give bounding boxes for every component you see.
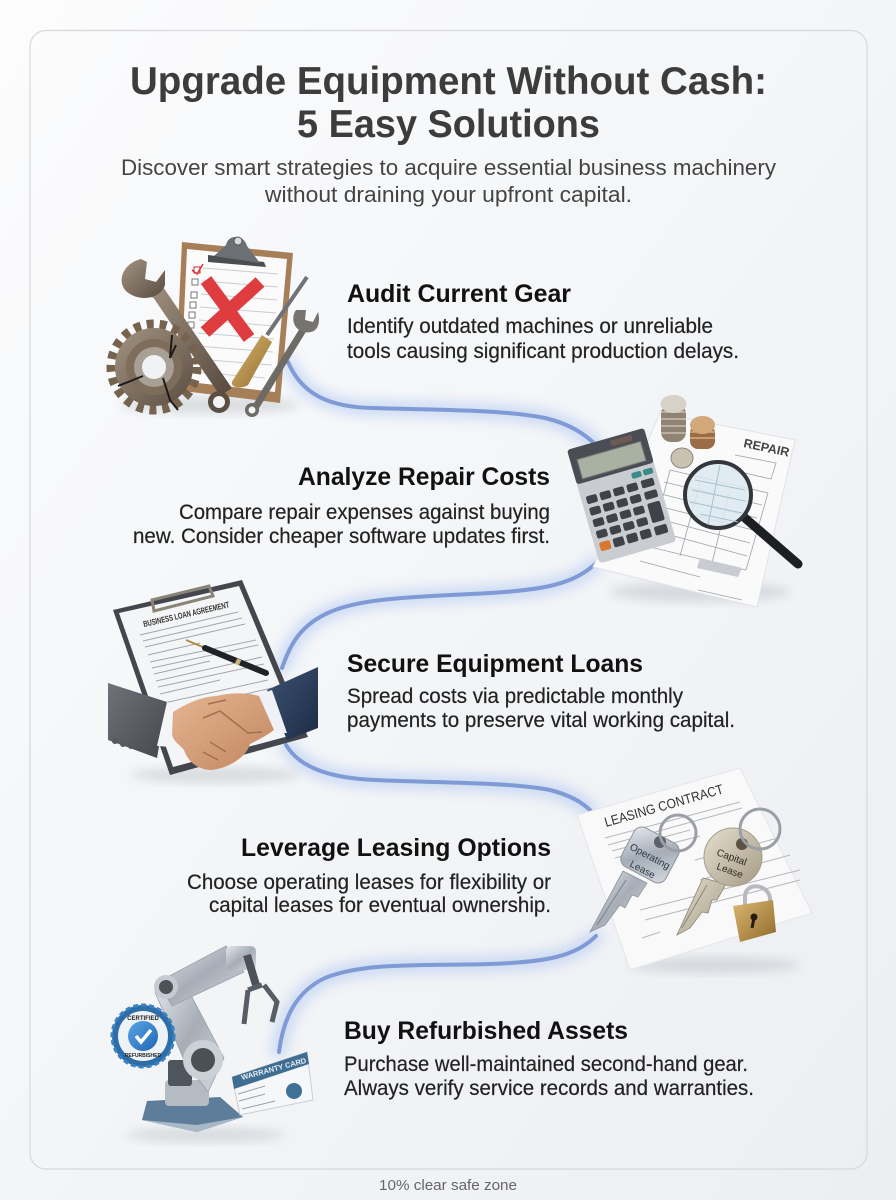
clipboard [113,580,308,775]
step 4 text [187,834,551,917]
step 2 text: Compare repair expenses against buying [179,501,550,524]
pen [186,640,266,673]
silver key: operating lease: Operating [628,842,672,872]
step 2 text [133,463,550,548]
connector: step 3 to step 4 [286,745,591,811]
broken gear [111,324,197,410]
step 1 text: tools causing significant production delays. [347,340,739,363]
icon: audit tools and clipboard [111,237,319,417]
connector: step 1 to step 2 [288,362,597,446]
step 3 text: payments to preserve vital working capital. [347,709,735,732]
silver key: operating lease: Lease [628,859,657,882]
step 4 text: Leverage Leasing Options [241,834,551,862]
warranty card [232,1052,313,1115]
small wrench [245,310,319,417]
screwdriver [232,277,307,387]
icon: loan agreement and handshake [108,580,318,783]
coin stacks [660,395,715,468]
clipboard: BUSINESS LOAN AGREEMENT [142,599,231,629]
step 5 text: Purchase well-maintained second-hand gear. [344,1053,748,1076]
certified badge [112,1005,174,1067]
step 1 text [347,280,739,363]
step 3 text: Secure Equipment Loans [347,650,643,678]
repair invoice: REPAIR [742,436,791,460]
certified badge: CERTIFIED [127,1016,159,1022]
icon: calculator, repair invoice and magnifier [567,395,798,607]
wrench [122,259,230,413]
step 1 text: Identify outdated machines or unreliable [347,315,713,338]
contract: LEASING CONTRACT [603,782,725,830]
subtitle: without draining your upfront capital. [264,182,632,207]
padlock [733,886,776,942]
step 2 text: Analyze Repair Costs [298,463,550,491]
handshake hands [172,693,274,770]
brass key: capital lease: Capital [715,847,748,868]
calculator [567,428,676,563]
robot arm [154,946,277,1092]
footer note: 10% clear safe zone [379,1178,517,1194]
warranty card: WARRANTY CARD [240,1056,308,1082]
title [130,60,767,146]
certified badge: REFURBISHED [125,1053,161,1059]
left sleeve [108,683,178,758]
repair invoice [593,413,795,607]
title: Upgrade Equipment Without Cash: [130,60,767,103]
clipboard [175,237,293,403]
title: 5 Easy Solutions [297,103,600,146]
icon: leasing contract and keys [577,768,812,973]
icon: refurbished robot arm, badge and warranty card [112,946,313,1142]
step 5 text [344,1017,754,1100]
step 1 text: Audit Current Gear [347,280,571,308]
brass key: capital lease: Lease [715,861,745,881]
right sleeve [258,667,318,740]
step 3 text [347,650,735,732]
step 5 text: Always verify service records and warranties. [344,1077,754,1100]
connector: step 4 to step 5 [279,936,596,1052]
magnifier [685,462,798,564]
contract [577,768,812,970]
step 4 text: capital leases for eventual ownership. [209,894,551,917]
silver key: operating lease [590,815,696,932]
step 2 text: new. Consider cheaper software updates first. [133,525,550,548]
connector: step 2 to step 3 [282,562,597,668]
subtitle: Discover smart strategies to acquire essential business machinery [121,155,777,180]
subtitle [121,155,777,207]
step 5 text: Buy Refurbished Assets [344,1017,628,1045]
brass key: capital lease [677,809,780,935]
step 3 text: Spread costs via predictable monthly [347,685,683,708]
robot base [142,1060,243,1132]
step 4 text: Choose operating leases for flexibility or [187,871,551,894]
